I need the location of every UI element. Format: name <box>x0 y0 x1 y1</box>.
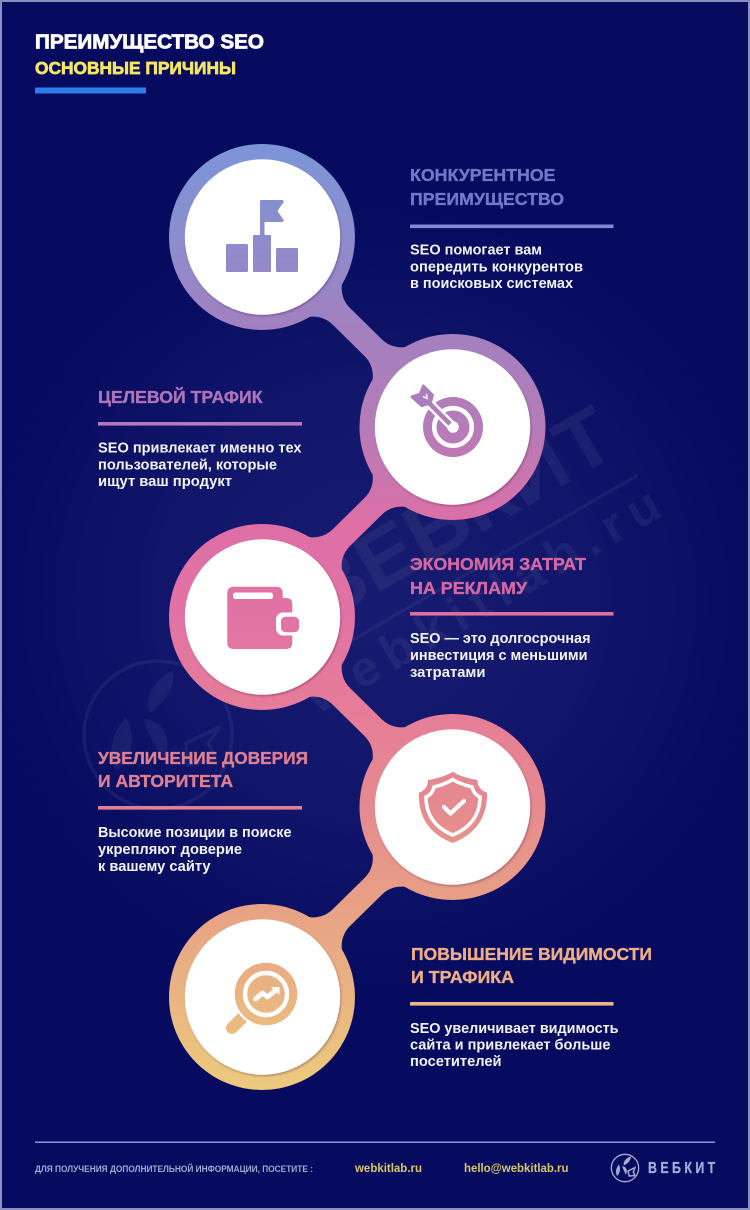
ring 2 <box>360 334 546 520</box>
heading <box>411 944 652 987</box>
text block: target traffic <box>98 386 302 490</box>
connector 3 <box>308 663 406 761</box>
heading <box>98 748 308 791</box>
title: ПРЕИМУЩЕСТВО SEO <box>35 32 264 54</box>
watermark wordmark: ВЕБКИТ <box>286 389 630 641</box>
body: посетителей <box>410 1054 502 1070</box>
ring 5 <box>169 904 355 1090</box>
watermark logo <box>84 661 232 809</box>
text block: trust and authority <box>98 748 308 875</box>
footer logo <box>611 1154 639 1182</box>
body: укрепляют доверие <box>98 842 242 858</box>
connector 1 <box>308 283 406 381</box>
body: пользователей, которые <box>98 458 277 474</box>
heading: КОНКУРЕНТНОЕ <box>410 165 556 185</box>
rule <box>98 422 302 426</box>
heading: ПРЕИМУЩЕСТВО <box>410 189 564 209</box>
connected circle chain <box>169 144 546 1090</box>
footer note: ДЛЯ ПОЛУЧЕНИЯ ДОПОЛНИТЕЛЬНОЙ ИНФОРМАЦИИ, ПОСЕТИТЕ : <box>35 1163 313 1175</box>
footer wordmark: ВЕБКИТ <box>648 1159 716 1176</box>
disc 4 <box>375 729 530 885</box>
body: Высокие позиции в поиске <box>98 825 292 841</box>
icon: target with arrow <box>412 386 483 457</box>
watermark <box>84 389 670 809</box>
rule <box>410 224 614 228</box>
heading: ЦЕЛЕВОЙ ТРАФИК <box>98 386 263 407</box>
icon: wallet <box>227 587 301 649</box>
body <box>98 440 302 490</box>
disc 2 <box>375 349 530 505</box>
heading: ЭКОНОМИЯ ЗАТРАТ <box>410 554 586 574</box>
disc 3 <box>185 539 340 695</box>
watermark line <box>240 475 638 705</box>
body <box>410 631 590 681</box>
body: ищут ваш продукт <box>98 474 232 490</box>
body: затратами <box>410 665 486 681</box>
body: в поисковых системах <box>410 276 573 292</box>
rule <box>410 612 614 616</box>
ring 3 <box>169 524 355 710</box>
connector 2 <box>308 473 406 571</box>
heading: НА РЕКЛАМУ <box>410 578 528 598</box>
body: инвестиция с меньшими <box>410 648 588 664</box>
body: SEO — это долгосрочная <box>410 631 590 647</box>
title accent bar <box>35 88 146 94</box>
ring 4 <box>360 714 546 900</box>
disc 1 <box>185 159 340 315</box>
icon: shield with check <box>419 772 487 843</box>
body: SEO помогает вам <box>410 242 542 258</box>
rule <box>98 806 302 810</box>
heading: И ТРАФИКА <box>411 967 514 987</box>
connector 4 <box>308 853 406 951</box>
disc 5 <box>185 919 340 1075</box>
watermark url: webkitlab.ru <box>295 476 670 725</box>
body: SEO привлекает именно тех <box>98 440 302 456</box>
rule <box>410 1002 614 1006</box>
icon: podium with flag <box>226 200 298 272</box>
body <box>98 825 292 875</box>
body: опередить конкурентов <box>410 260 583 276</box>
footer email: hello@webkitlab.ru <box>464 1163 568 1175</box>
text block: competitive advantage <box>410 165 614 292</box>
body: сайта и привлекает больше <box>410 1038 610 1054</box>
body <box>410 242 583 292</box>
ring 1 <box>169 144 355 330</box>
heading: УВЕЛИЧЕНИЕ ДОВЕРИЯ <box>98 748 308 768</box>
heading <box>410 554 586 598</box>
heading: ПОВЫШЕНИЕ ВИДИМОСТИ <box>411 944 652 964</box>
body: к вашему сайту <box>98 859 210 875</box>
text block: visibility and traffic <box>410 944 652 1070</box>
body: SEO увеличивает видимость <box>410 1021 619 1037</box>
footer website: webkitlab.ru <box>354 1163 422 1175</box>
body <box>410 1021 619 1070</box>
icon: magnifier with trend <box>232 960 300 1028</box>
footer <box>35 1142 716 1182</box>
title block <box>35 32 264 94</box>
heading <box>410 165 564 209</box>
subtitle: ОСНОВНЫЕ ПРИЧИНЫ <box>35 58 236 78</box>
heading: И АВТОРИТЕТА <box>98 771 233 791</box>
footer divider <box>35 1142 715 1143</box>
text block: ad cost savings <box>410 554 614 681</box>
